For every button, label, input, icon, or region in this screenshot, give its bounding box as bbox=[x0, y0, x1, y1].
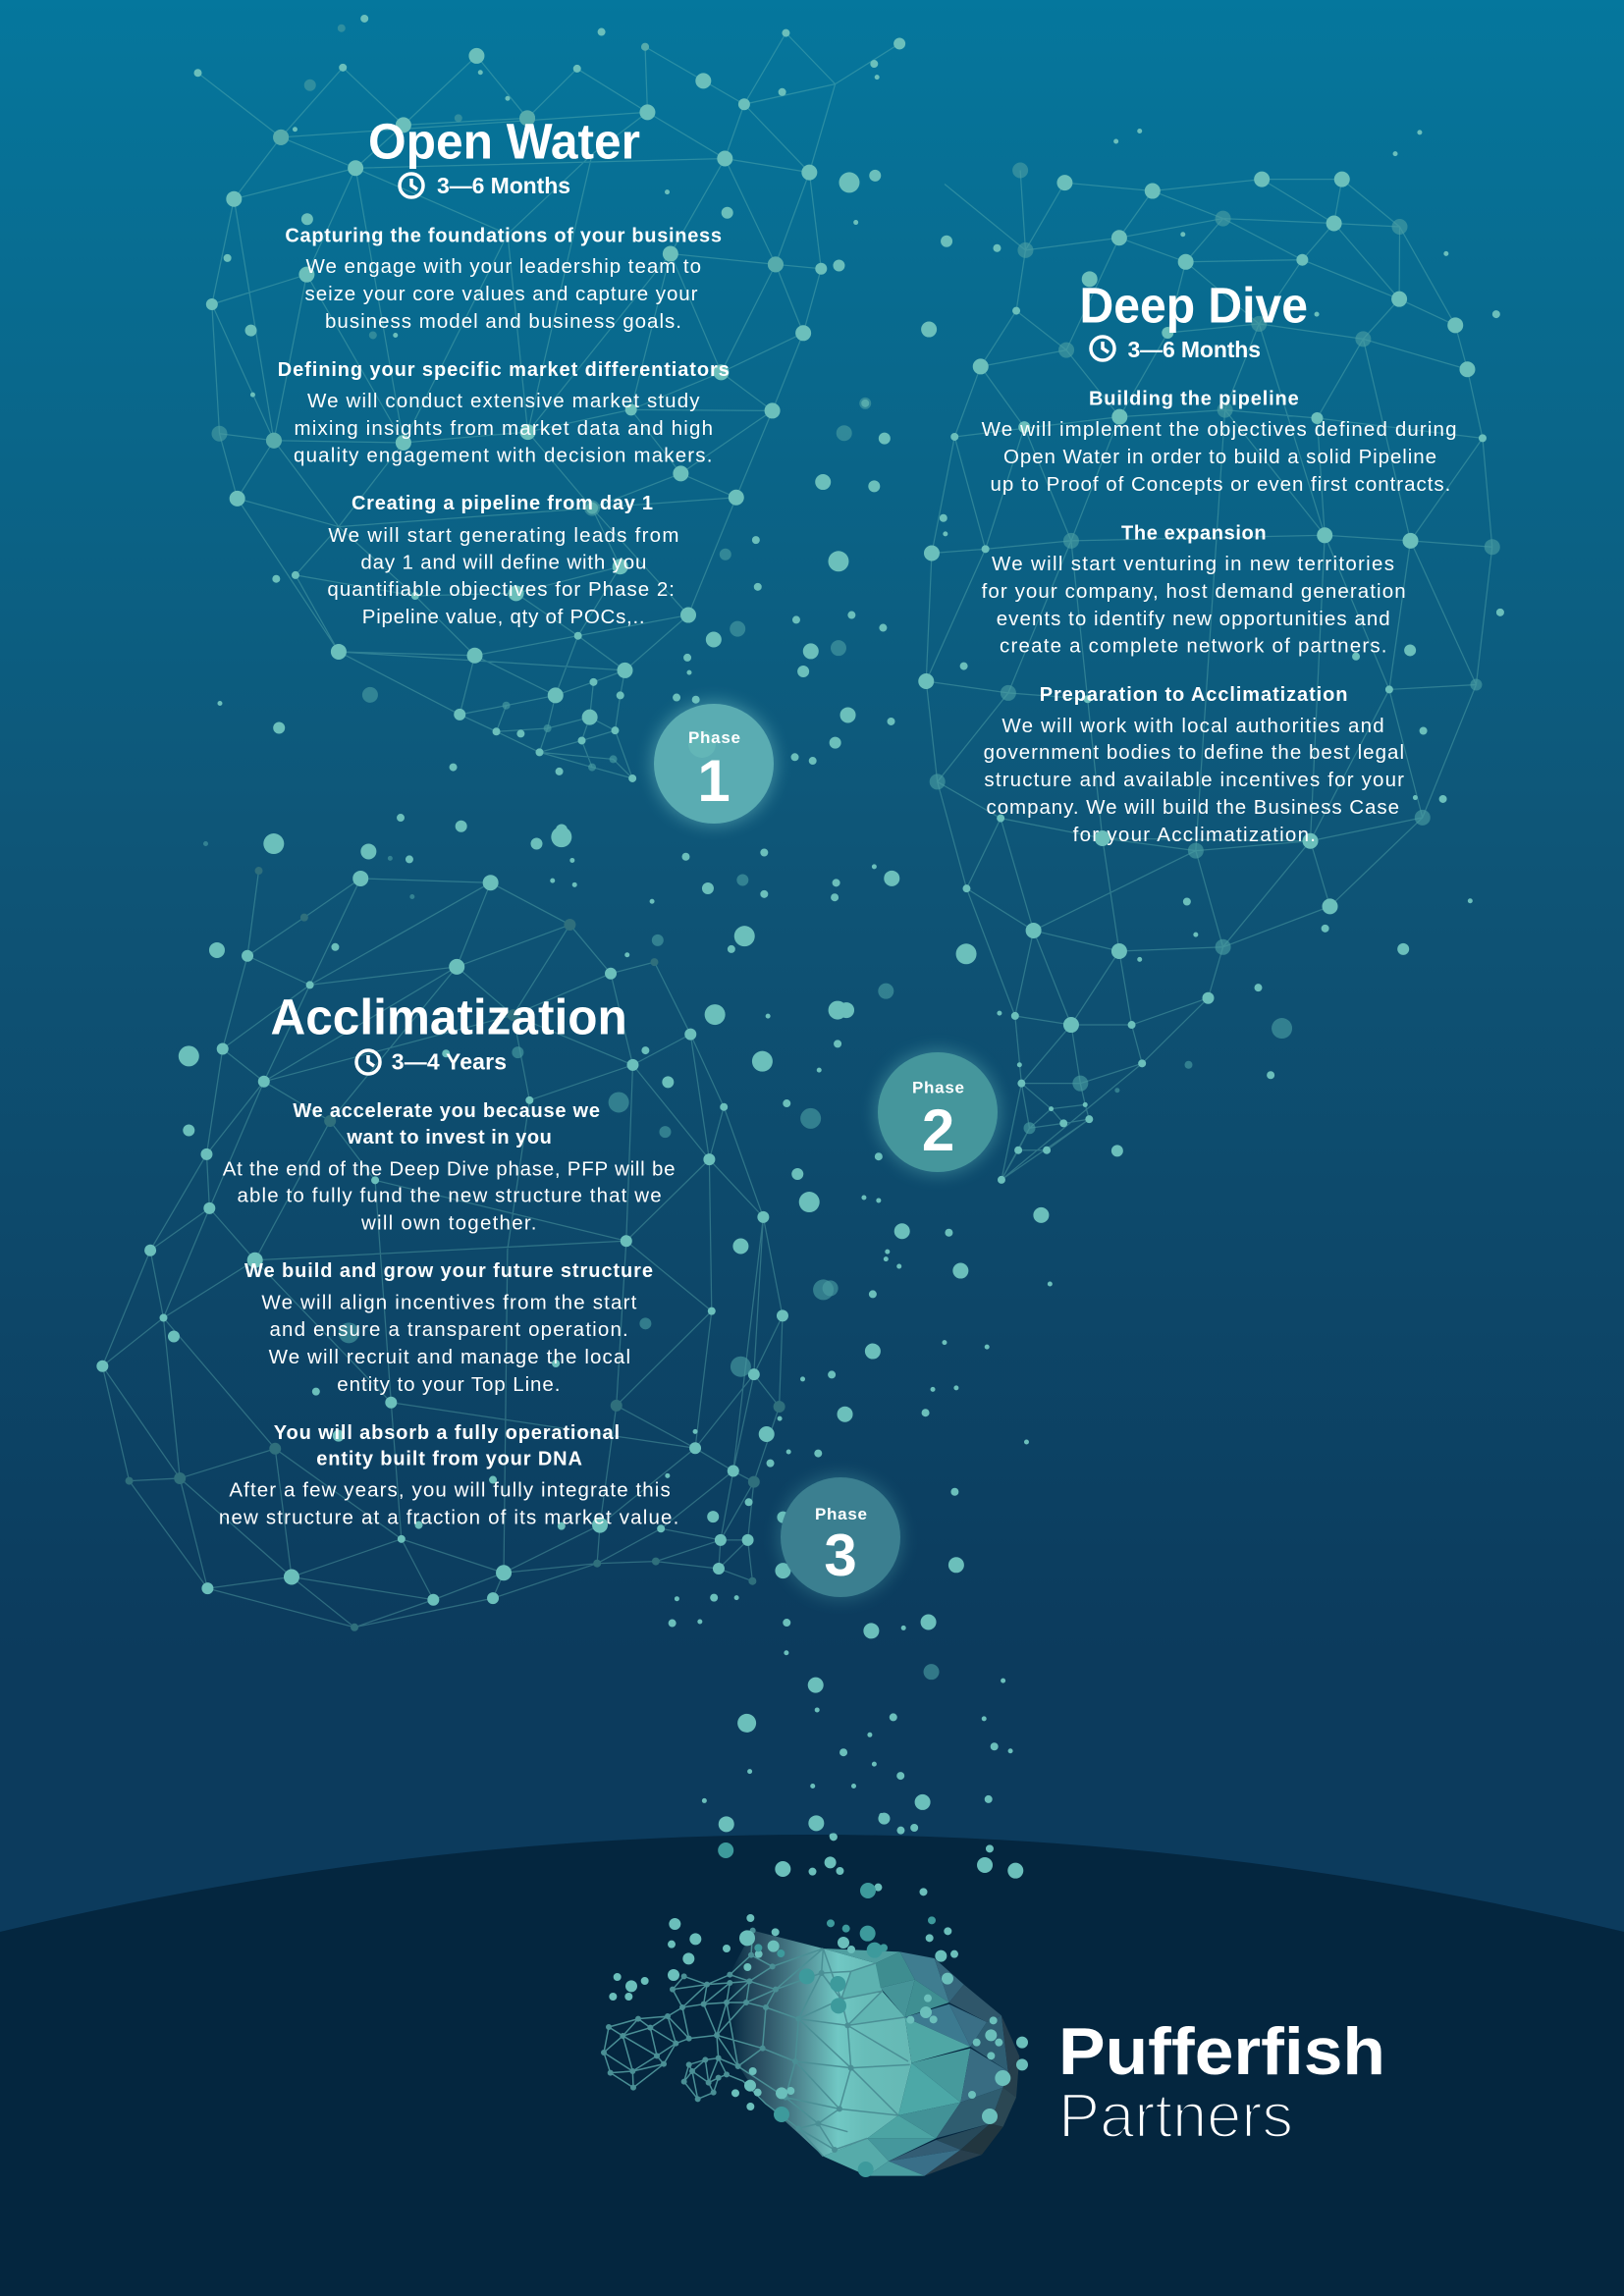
logo wordmark: Pufferfish: Pufferfish bbox=[1058, 2014, 1385, 2089]
block: the expansion: for your company, host demand generation bbox=[982, 580, 1406, 603]
heading: acclimatization: Acclimatization bbox=[271, 989, 627, 1045]
block: building the pipeline: Building the pipeline bbox=[1089, 389, 1299, 410]
block: capturing the foundations: Capturing the foundations of your business bbox=[285, 226, 722, 247]
block: creating a pipeline: quantifiable objectives for Phase 2: bbox=[327, 578, 675, 601]
block: we build and grow: entity to your Top Line. bbox=[337, 1373, 560, 1396]
block: defining market differentiators: Defining your specific market differentiators bbox=[278, 359, 730, 381]
free bubbles around acclimatization bbox=[174, 837, 824, 1624]
badge: phase 2: Phase bbox=[912, 1078, 964, 1097]
block: you will absorb: You will absorb a fully operational bbox=[274, 1422, 620, 1444]
block: you will absorb: new structure at a fraction of its market value. bbox=[219, 1506, 678, 1529]
block: creating a pipeline: We will start generating leads from bbox=[328, 524, 678, 547]
badge: phase 1: 1 bbox=[697, 748, 731, 814]
block: we accelerate you: will own together. bbox=[360, 1212, 536, 1235]
block: the expansion: events to identify new opportunities and bbox=[997, 608, 1390, 630]
block: you will absorb: entity built from your DNA bbox=[316, 1449, 582, 1470]
panel: open water bbox=[278, 114, 730, 628]
heading: open water: Open Water bbox=[368, 114, 640, 169]
free bubbles around open water bbox=[220, 19, 892, 830]
block: preparation to acclimatization: We will work with local authorities and bbox=[1001, 715, 1384, 737]
block: capturing the foundations: business model and business goals. bbox=[325, 310, 681, 333]
block: you will absorb: After a few years, you will fully integrate this bbox=[229, 1478, 671, 1502]
block: we build and grow bbox=[244, 1260, 653, 1396]
block: the expansion: The expansion bbox=[1121, 522, 1267, 544]
duration: 3—4 Years bbox=[392, 1049, 507, 1075]
block: the expansion: We will start venturing in new territories bbox=[992, 553, 1394, 575]
block: preparation to acclimatization: for your Acclimatization. bbox=[1073, 824, 1316, 846]
block: creating a pipeline: day 1 and will define with you bbox=[360, 551, 646, 573]
icon: clock bbox=[400, 174, 423, 197]
block: building the pipeline: We will implement the objectives defined during bbox=[982, 418, 1457, 441]
block: we build and grow: We will recruit and manage the local bbox=[269, 1346, 630, 1368]
block: the expansion bbox=[982, 522, 1406, 658]
block: capturing the foundations bbox=[285, 226, 722, 333]
logo: pufferfish illustration bbox=[604, 1918, 1022, 2176]
block: creating a pipeline: Creating a pipeline from day 1 bbox=[352, 493, 653, 514]
bubbles above the fish bbox=[726, 1819, 1015, 1892]
block: defining market differentiators bbox=[278, 359, 730, 467]
bubbles around the fish bbox=[613, 1918, 1022, 2169]
badge: phase 1: Phase bbox=[688, 728, 740, 747]
block: we build and grow: and ensure a transparent operation. bbox=[269, 1318, 628, 1341]
badge: phase 1 bbox=[651, 701, 777, 827]
block: defining market differentiators: quality engagement with decision makers. bbox=[294, 444, 712, 467]
block: building the pipeline bbox=[982, 389, 1457, 496]
block: you will absorb bbox=[219, 1422, 678, 1529]
fish wireframe bbox=[604, 1931, 910, 2157]
block: capturing the foundations: seize your core values and capture your bbox=[304, 283, 698, 305]
block: we accelerate you: At the end of the Deep Dive phase, PFP will be bbox=[223, 1158, 675, 1180]
heading: deep dive: Deep Dive bbox=[1080, 277, 1308, 334]
fish body facets bbox=[727, 1931, 1019, 2176]
block: we build and grow: We will align incentives from the start bbox=[261, 1292, 637, 1313]
icon: clock bbox=[1091, 337, 1114, 360]
duration: 3—6 Months bbox=[1127, 337, 1261, 362]
network: deep dive mesh bbox=[926, 132, 1500, 1180]
block: we build and grow: We build and grow your future structure bbox=[244, 1260, 653, 1282]
network: acclimatization mesh bbox=[102, 837, 824, 1628]
block: defining market differentiators: mixing insights from market data and high bbox=[295, 417, 713, 440]
rising bubble stream bbox=[704, 867, 1050, 1836]
network: open water mesh bbox=[198, 19, 899, 830]
dark seabed curve bbox=[0, 1835, 1624, 2296]
block: we accelerate you: able to fully fund the new structure that we bbox=[238, 1184, 662, 1207]
icon: clock bbox=[356, 1050, 380, 1074]
badge: phase 3: Phase bbox=[815, 1505, 867, 1523]
block: we accelerate you bbox=[223, 1100, 675, 1235]
block: capturing the foundations: We engage with your leadership team to bbox=[306, 255, 701, 278]
panel: deep dive bbox=[982, 277, 1457, 846]
badge: phase 2: 2 bbox=[922, 1097, 954, 1163]
block: preparation to acclimatization: government bodies to define the best legal bbox=[984, 741, 1404, 764]
panel: acclimatization bbox=[219, 989, 678, 1529]
block: preparation to acclimatization bbox=[984, 684, 1404, 846]
block: building the pipeline: Open Water in order to build a solid Pipeline bbox=[1003, 446, 1436, 468]
badge: phase 2 bbox=[875, 1049, 1001, 1175]
block: we accelerate you: want to invest in you bbox=[346, 1127, 552, 1148]
duration: 3—6 Months bbox=[437, 173, 570, 198]
block: creating a pipeline: Pipeline value, qty of POCs,.. bbox=[362, 606, 645, 628]
block: the expansion: create a complete network of partners. bbox=[1000, 634, 1386, 658]
block: defining market differentiators: We will conduct extensive market study bbox=[307, 390, 700, 412]
logo wordmark: Partners: Partners bbox=[1058, 2080, 1293, 2151]
block: preparation to acclimatization: Preparation to Acclimatization bbox=[1040, 684, 1347, 706]
block: preparation to acclimatization: company. We will build the Business Case bbox=[986, 796, 1399, 819]
block: we accelerate you: We accelerate you because we bbox=[293, 1100, 600, 1122]
block: preparation to acclimatization: structure and available incentives for your bbox=[984, 769, 1404, 791]
free bubbles around deep dive bbox=[929, 132, 1500, 1150]
block: building the pipeline: up to Proof of Concepts or even first contracts. bbox=[990, 473, 1450, 496]
badge: phase 3 bbox=[778, 1474, 903, 1600]
badge: phase 3: 3 bbox=[824, 1522, 857, 1588]
block: creating a pipeline bbox=[327, 493, 678, 628]
